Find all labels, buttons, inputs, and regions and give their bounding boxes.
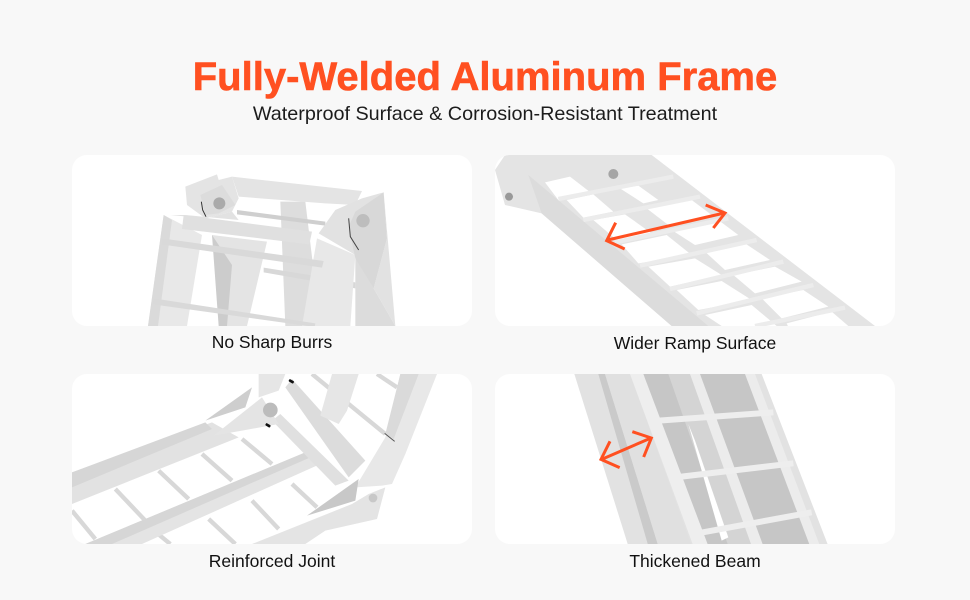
subtitle: Waterproof Surface & Corrosion-Resistant Treatment	[253, 103, 717, 125]
panel: reinforced joint	[72, 374, 472, 544]
ramp body	[495, 155, 875, 327]
caption: reinforced joint: Reinforced Joint	[209, 551, 335, 571]
panel: wider ramp surface	[495, 155, 895, 326]
panel: no sharp burrs	[72, 155, 472, 326]
caption: no sharp burrs: No Sharp Burrs	[212, 332, 332, 352]
arrow: width	[607, 205, 725, 249]
arrow: beam thickness	[601, 432, 651, 468]
panel: thickened beam	[495, 374, 895, 544]
title: Fully-Welded Aluminum Frame	[193, 55, 777, 99]
caption: thickened beam: Thickened Beam	[629, 551, 761, 571]
caption: wider ramp surface: Wider Ramp Surface	[614, 333, 776, 353]
